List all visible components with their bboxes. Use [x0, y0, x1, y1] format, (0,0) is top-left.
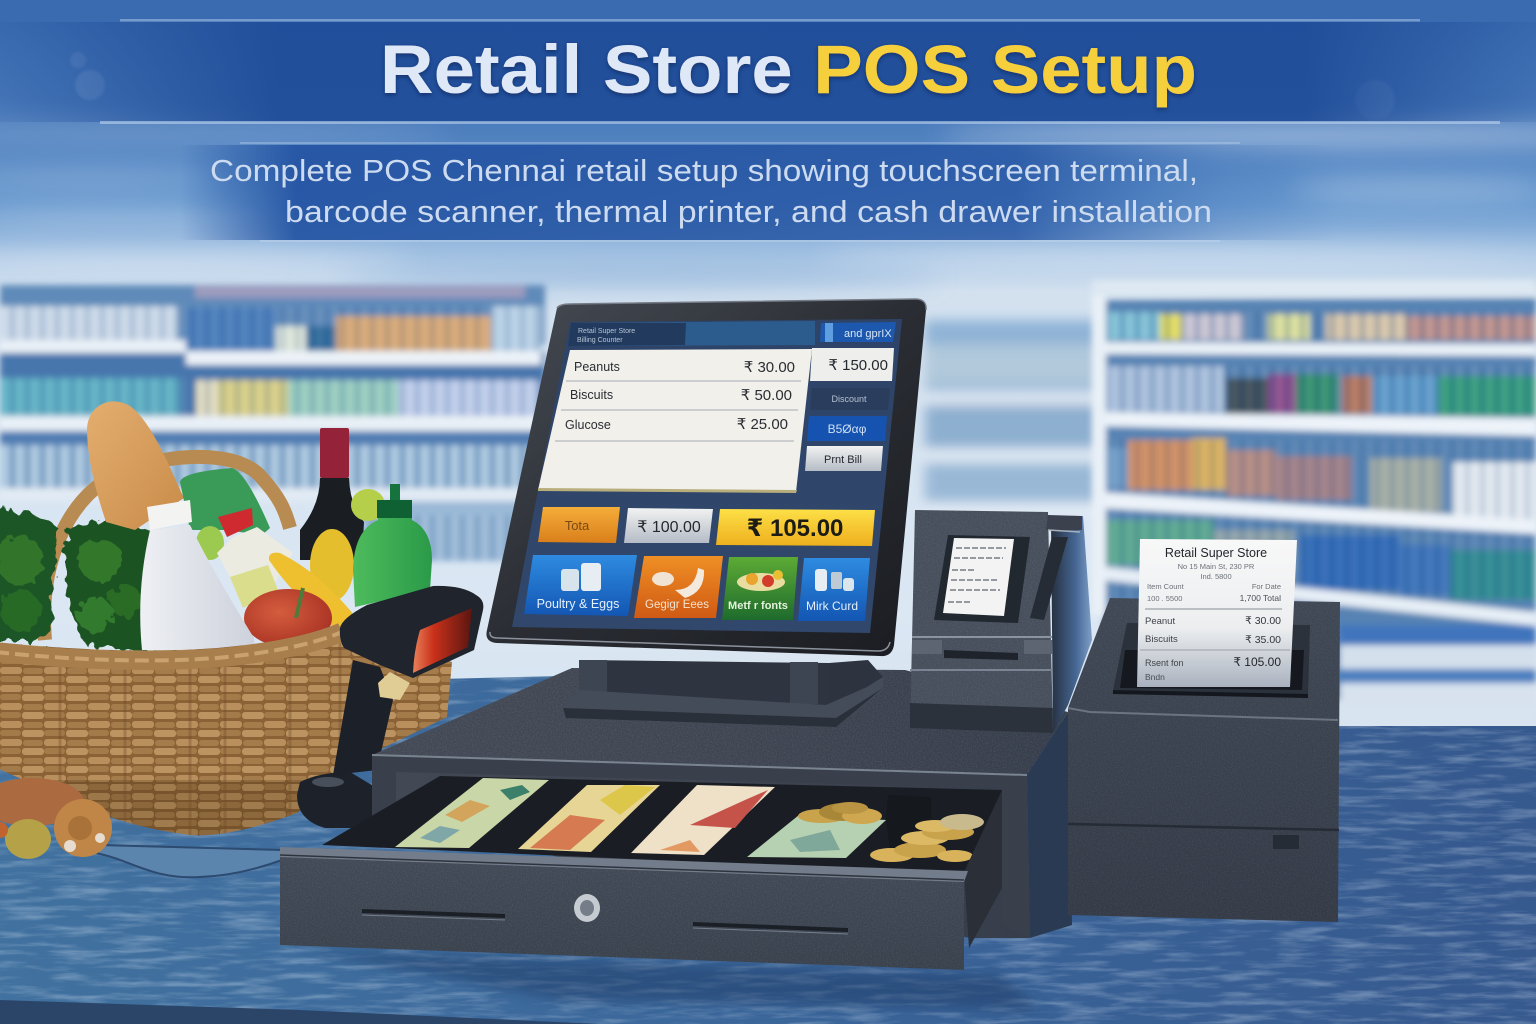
apple: [244, 588, 332, 647]
tile: meat and fruits: [722, 557, 798, 620]
totals row: Tota: [565, 518, 590, 533]
tile: milk curd: [798, 558, 870, 621]
item table: [538, 349, 812, 493]
receipt: 1,700 Total: [1240, 593, 1281, 603]
screen header: and gprIX: [844, 328, 892, 340]
screen: [512, 319, 902, 633]
receipt: Ind. 5800: [1200, 572, 1232, 581]
header band: [0, 19, 1536, 144]
stand neck: [579, 660, 829, 705]
coins: [798, 802, 984, 862]
subtitle: Complete POS Chennai retail setup showing touchscreen terminal,: [210, 153, 1198, 188]
blurred shelves: center: [925, 320, 1100, 515]
scanner head: [340, 586, 483, 678]
side buttons: Prnt Bill: [824, 454, 862, 466]
thermal printer: small behind monitor: [910, 510, 1092, 733]
drawer shadow: [300, 950, 1040, 1010]
counter mat: [90, 845, 282, 877]
monitor bezel: [486, 299, 926, 656]
bread loaf: [87, 401, 184, 530]
screen header: Billing Counter: [577, 337, 623, 344]
row 4 products: [1104, 520, 1214, 565]
yellow fruit: [310, 529, 354, 601]
tile: eggs: Gegigr Eees: [645, 599, 709, 611]
monitor stand: [563, 660, 883, 727]
red cap bottle: [217, 508, 293, 608]
drawer slots: [362, 909, 848, 934]
touchscreen terminal: [486, 299, 926, 656]
receipt: ₹ 30.00: [1245, 615, 1281, 627]
item table: ₹ 25.00: [737, 416, 788, 433]
category tiles: [524, 555, 870, 621]
wine bottle: [300, 428, 364, 560]
receipt: 100 . 5500: [1147, 594, 1182, 603]
green bottle: [353, 484, 432, 607]
receipt: Biscuits: [1145, 634, 1178, 645]
tile: milk curd: Mirk Curd: [806, 599, 858, 613]
basket body: [0, 626, 465, 840]
side buttons: ₹ 150.00: [828, 357, 888, 374]
scanner handle: [333, 660, 393, 775]
banana: [269, 553, 358, 632]
cash drawer front: [280, 790, 1002, 970]
receipt: Retail Super Store: [1165, 546, 1267, 560]
grocery basket: [0, 401, 465, 859]
scanner trigger: [378, 672, 410, 700]
receipt: Peanut: [1145, 616, 1175, 627]
receipt: Rsent fon: [1145, 658, 1184, 668]
top ledge recess: [1113, 623, 1310, 695]
blurred shelves: right: [1092, 280, 1536, 728]
item table: ₹ 30.00: [744, 359, 795, 376]
tile: poultry and eggs: [524, 555, 637, 616]
basket handle: [44, 457, 290, 640]
receipt: Bndn: [1145, 672, 1165, 682]
item table: ₹ 50.00: [741, 387, 792, 404]
scanner base: [297, 772, 380, 828]
receipt: ₹ 35.00: [1245, 634, 1281, 646]
printer body: [1068, 598, 1340, 922]
item table: Biscuits: [570, 388, 613, 402]
printer paper: [943, 538, 1014, 616]
counter front edge: [0, 1000, 600, 1024]
tile: meat and fruits: Metf r fonts: [728, 600, 788, 612]
shelf boards: [1100, 342, 1536, 356]
banknotes: [395, 778, 886, 858]
stand base: [563, 677, 883, 727]
scanner red window: [413, 608, 472, 673]
receipt: For Date: [1252, 582, 1281, 591]
top row products: [1106, 312, 1160, 340]
item table: Peanuts: [574, 360, 620, 374]
totals row: ₹ 100.00: [637, 519, 701, 536]
receipt: Item Count: [1147, 582, 1185, 591]
screen header: Retail Super Store: [578, 328, 635, 335]
subtitle: barcode scanner, thermal printer, and cash drawer installation: [285, 194, 1212, 229]
title: Retail Store POS Setup: [380, 31, 1197, 108]
tile: eggs: [634, 556, 723, 618]
side buttons: B5Øαφ: [828, 422, 867, 436]
base highlight: [312, 777, 344, 787]
drawer lock: [574, 894, 600, 922]
tile: poultry and eggs: Poultry & Eggs: [537, 597, 619, 611]
screen header: [568, 321, 896, 346]
leafy greens: [0, 508, 152, 652]
barcode scanner: [297, 586, 483, 828]
receipt: No 15 Main St, 230 PR: [1178, 562, 1255, 571]
cash drawer body: [372, 668, 1072, 938]
thermal printer with receipt: [1068, 539, 1340, 922]
white jug: [140, 500, 255, 650]
tray divider: [886, 795, 931, 850]
side buttons: Discount: [831, 394, 867, 404]
subtitle: [180, 145, 1340, 242]
receipt: ₹ 105.00: [1233, 655, 1281, 669]
paper slot: [1120, 650, 1304, 690]
totals row: ₹ 105.00: [747, 515, 843, 542]
cash drawer tray: [322, 776, 1002, 874]
counter: [0, 676, 1536, 1024]
side buttons: [805, 348, 894, 471]
loose produce: [0, 778, 112, 859]
row 5 products: [1340, 625, 1536, 645]
receipt: [1137, 539, 1297, 687]
totals row: [538, 507, 875, 546]
green box: [180, 468, 270, 535]
row 2 products: [1106, 366, 1224, 412]
stand rear arm: [826, 660, 883, 727]
item table: Glucose: [565, 418, 611, 432]
lime: [351, 489, 385, 521]
row 3 products: [1106, 448, 1130, 488]
blurred shelves: left: [0, 285, 545, 561]
small apple: [196, 526, 224, 560]
